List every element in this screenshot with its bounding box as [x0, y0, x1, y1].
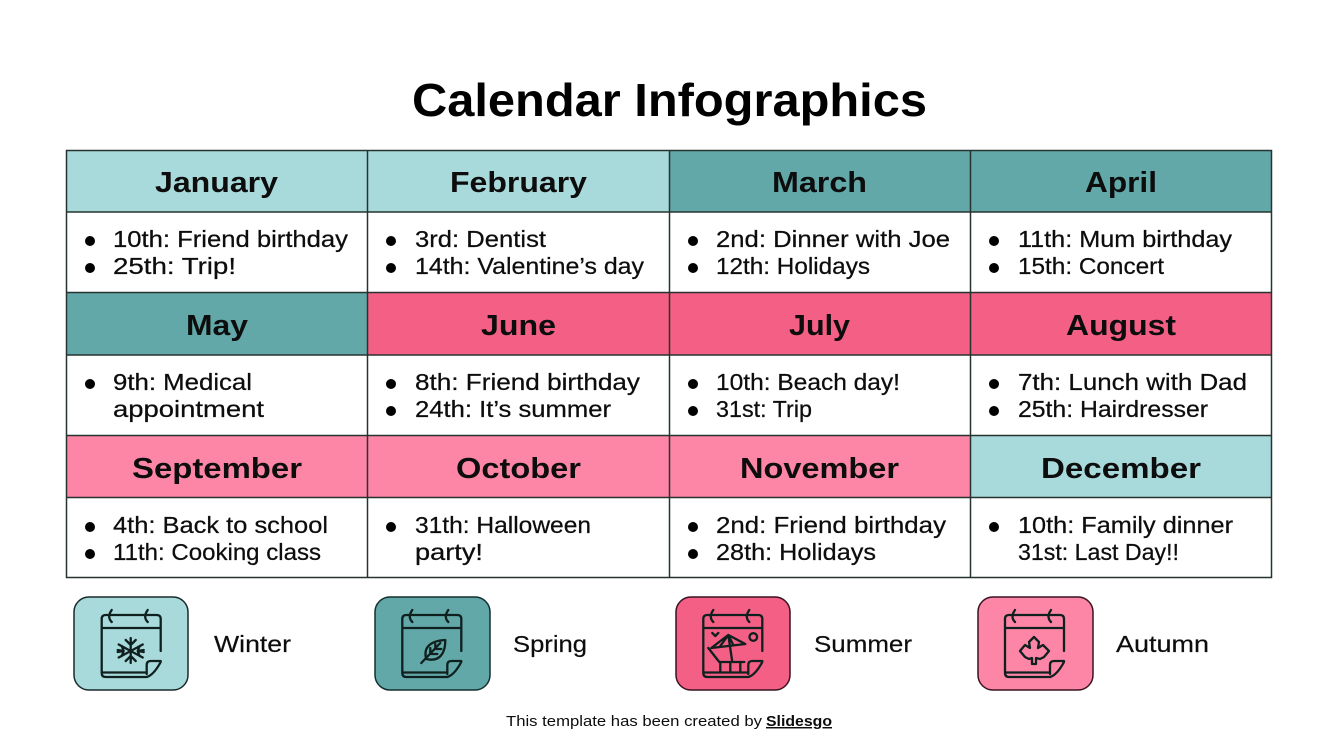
panel: August: August — [1066, 310, 1176, 342]
panel: September — [66, 436, 368, 565]
panel: November: November — [740, 453, 899, 485]
footer credit — [506, 714, 832, 730]
panel: October — [368, 436, 670, 565]
panel: June: June — [481, 310, 556, 342]
legend: Winter — [74, 597, 291, 690]
panel: July: 10th: Beach day! — [716, 369, 900, 395]
panel: March: 2nd: Dinner with Joe — [716, 226, 950, 252]
icon: summer calendar beach umbrella — [703, 610, 762, 677]
panel: April: 11th: Mum birthday — [1018, 226, 1232, 252]
footer credit: This template has been created by — [506, 714, 763, 730]
panel: December: 31st: Last Day!! — [1018, 539, 1179, 565]
panel: January: 10th: Friend birthday — [113, 226, 348, 252]
panel: June: 8th: Friend birthday — [415, 369, 640, 395]
panel: April: 15th: Concert — [1018, 253, 1164, 279]
panel: April: April — [1085, 167, 1157, 199]
panel: November: 2nd: Friend birthday — [716, 512, 946, 538]
panel: September: September — [132, 453, 302, 485]
panel: March: 12th: Holidays — [716, 253, 870, 279]
legend: Spring — [375, 597, 587, 690]
panel: May: 9th: Medical — [113, 369, 252, 395]
icon: autumn calendar maple leaf — [1005, 610, 1064, 677]
calendar table — [66, 150, 1272, 578]
panel: April — [970, 150, 1272, 279]
panel: June — [368, 292, 670, 422]
panel: March — [670, 150, 970, 279]
panel: February: February — [450, 167, 587, 199]
panel: July: July — [789, 310, 850, 342]
panel: October: October — [456, 453, 581, 485]
panel: May — [66, 292, 368, 422]
panel: August: 7th: Lunch with Dad — [1018, 369, 1247, 395]
footer credit: Slidesgo — [766, 714, 832, 730]
panel: January: January — [155, 167, 278, 199]
panel: November: 28th: Holidays — [716, 539, 876, 565]
panel: January — [66, 150, 368, 279]
panel: February: 14th: Valentine’s day — [415, 253, 644, 279]
panel: February: 3rd: Dentist — [415, 226, 547, 252]
label: Autumn: Autumn — [1116, 631, 1209, 657]
label: Spring: Spring — [513, 631, 587, 657]
panel: October: 31th: Halloween — [415, 512, 591, 538]
legend: Summer — [676, 597, 912, 690]
panel: September: 4th: Back to school — [113, 512, 328, 538]
panel: December — [970, 436, 1272, 565]
panel: May: May — [186, 310, 248, 342]
panel: January: 25th: Trip! — [113, 253, 236, 279]
icon: spring calendar leaf — [402, 610, 461, 677]
panel: December: December — [1041, 453, 1201, 485]
label: Winter: Winter — [214, 631, 291, 657]
panel: October: party! — [415, 539, 483, 565]
panel: November — [670, 436, 970, 565]
panel: March: March — [772, 167, 867, 199]
legend: Autumn — [978, 597, 1209, 690]
panel: August: 25th: Hairdresser — [1018, 396, 1208, 422]
panel: August — [970, 292, 1272, 422]
title: Calendar Infographics — [412, 74, 927, 126]
icon: winter calendar snowflake — [102, 610, 161, 677]
panel: December: 10th: Family dinner — [1018, 512, 1233, 538]
panel: June: 24th: It’s summer — [415, 396, 611, 422]
label: Summer: Summer — [814, 631, 912, 657]
panel: September: 11th: Cooking class — [113, 539, 321, 565]
panel: February — [368, 150, 670, 279]
panel: May: appointment — [113, 396, 265, 422]
panel: July: 31st: Trip — [716, 396, 812, 422]
panel: July — [670, 292, 970, 422]
